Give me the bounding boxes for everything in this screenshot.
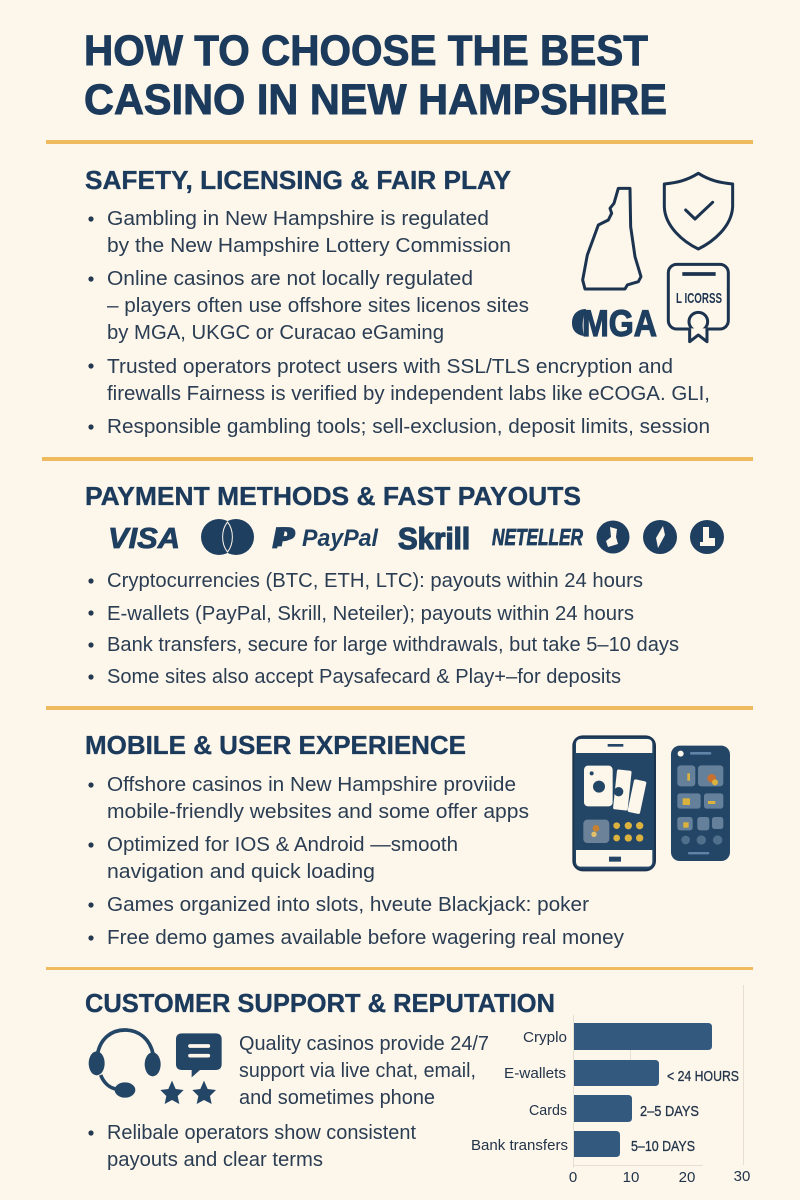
bullet list: safety bbox=[88, 208, 710, 438]
bar: e-wallets: E-wallets bbox=[504, 1065, 566, 1082]
bar: bank transfers: Bank transfers bbox=[471, 1137, 568, 1154]
bar: e-wallets bbox=[504, 1060, 739, 1086]
bullet list: mobile: mobile-friendly websites and some offer apps bbox=[107, 801, 529, 823]
bullet list: payments bbox=[88, 570, 679, 688]
bullet list: mobile: Free demo games available before wagering real money bbox=[107, 927, 624, 949]
icon: phone with casino cards bbox=[573, 736, 655, 870]
chart axis labels: 10 bbox=[623, 1169, 639, 1186]
bullet list: payments: Bank transfers, secure for large withdrawals, but take 5–10 days bbox=[107, 634, 679, 656]
bullet list: safety: by MGA, UKGC or Curacao eGaming bbox=[107, 322, 444, 344]
bar: crypto: Cryplo bbox=[523, 1029, 567, 1046]
icon: phone with game tiles bbox=[671, 746, 730, 861]
bullet list: payments: Some sites also accept Paysafecard & Play+–for deposits bbox=[107, 666, 621, 688]
icon: licence certificate bbox=[668, 264, 728, 342]
icon: chat bubble bbox=[176, 1033, 222, 1077]
title: CASINO IN NEW HAMPSHIRE bbox=[84, 76, 667, 124]
title: HOW TO CHOOSE THE BEST bbox=[84, 27, 648, 75]
bullet list: mobile: Offshore casinos in New Hampshire proviide bbox=[107, 774, 516, 796]
icon: licence certificate: L ICORSS bbox=[676, 290, 722, 307]
icon: rating stars bbox=[160, 1081, 216, 1104]
text: support channels bbox=[239, 1033, 489, 1109]
bullet list: payments: Cryptocurrencies (BTC, ETH, LTC): payouts within 24 hours bbox=[107, 570, 643, 592]
bar: cards: 2–5 DAYS bbox=[640, 1103, 699, 1120]
bullet list: payments: E-wallets (PayPal, Skrill, Neteiler); payouts within 24 hours bbox=[107, 603, 634, 625]
bullet list: reputation: Relibale operators show consistent bbox=[107, 1122, 416, 1144]
title bbox=[84, 27, 667, 124]
bullet list: mobile: Games organized into slots, hveute Blackjack: poker bbox=[107, 894, 589, 916]
text: support channels: and sometimes phone bbox=[239, 1087, 435, 1109]
panel: safety, licensing and fair play bbox=[85, 165, 733, 438]
icon: headset bbox=[89, 1030, 161, 1098]
icon: MGA logo: MGA bbox=[582, 303, 657, 344]
icon: shield with check bbox=[664, 173, 733, 249]
heading: mobile: MOBILE & USER EXPERIENCE bbox=[85, 730, 466, 760]
bullet list: safety: firewalls Fairness is verified by independent labs like eCOGA. GLI, bbox=[107, 383, 710, 405]
bar: crypto bbox=[523, 1023, 712, 1050]
bar chart: payout speed bbox=[471, 985, 750, 1186]
bullet list: reputation: payouts and clear terms bbox=[107, 1149, 323, 1171]
logo: Mastercard bbox=[201, 519, 254, 555]
text: support channels: Quality casinos provide 24/7 bbox=[239, 1033, 489, 1055]
bullet list: safety: Responsible gambling tools; sell-exclusion, deposit limits, session bbox=[107, 416, 710, 438]
logo: PayPal: P bbox=[277, 522, 296, 552]
logo: PayPal bbox=[272, 522, 379, 555]
bullet list: safety: Trusted operators protect users with SSL/TLS encryption and bbox=[107, 356, 673, 378]
heading: support: CUSTOMER SUPPORT & REPUTATION bbox=[85, 988, 555, 1018]
bullet list: mobile: Optimized for IOS & Android —smooth bbox=[107, 834, 458, 856]
bullet list: mobile: navigation and quick loading bbox=[107, 861, 375, 883]
bar: cards: Cards bbox=[529, 1102, 567, 1119]
text: support channels: support via live chat, email, bbox=[239, 1060, 476, 1082]
panel: customer support and reputation bbox=[85, 985, 750, 1186]
bullet list: safety: Online casinos are not locally regulated bbox=[107, 268, 473, 290]
icon: crypto coin 2 bbox=[643, 520, 677, 554]
chart axis labels: 0 bbox=[569, 1169, 577, 1186]
logo: PayPal: P bbox=[272, 522, 293, 555]
bar: bank transfers: 5–10 DAYS bbox=[631, 1138, 695, 1155]
bar: cards bbox=[529, 1095, 699, 1122]
logo: PayPal: PayPal bbox=[302, 525, 379, 552]
icon: crypto coin 1 bbox=[596, 520, 630, 554]
heading: payments: PAYMENT METHODS & FAST PAYOUTS bbox=[85, 481, 581, 511]
chart axis labels bbox=[569, 1168, 750, 1186]
bar: e-wallets: < 24 HOURS bbox=[667, 1068, 739, 1085]
logo: Visa: VISA bbox=[108, 523, 180, 555]
panel: mobile and user experience bbox=[85, 730, 730, 949]
logo: Neteller: NETELLER bbox=[492, 524, 583, 550]
bullet list: safety: – players often use offshore sites licenos sites bbox=[107, 295, 529, 317]
icon: crypto coin 3 bbox=[690, 520, 724, 554]
bullet list: safety: by the New Hampshire Lottery Commission bbox=[107, 235, 511, 257]
bullet list: safety: Gambling in New Hampshire is regulated bbox=[107, 208, 489, 230]
heading: safety: SAFETY, LICENSING & FAIR PLAY bbox=[85, 165, 511, 195]
bar: bank transfers bbox=[471, 1131, 695, 1157]
chart axis labels: 30 bbox=[734, 1168, 750, 1185]
bullet list: mobile bbox=[88, 774, 624, 949]
panel: payment methods and fast payouts bbox=[85, 481, 724, 688]
chart axis labels: 20 bbox=[679, 1169, 695, 1186]
bullet list: reputation bbox=[88, 1122, 416, 1171]
icon: New Hampshire outline bbox=[583, 188, 641, 289]
logo: Skrill: Skrill bbox=[398, 521, 470, 556]
